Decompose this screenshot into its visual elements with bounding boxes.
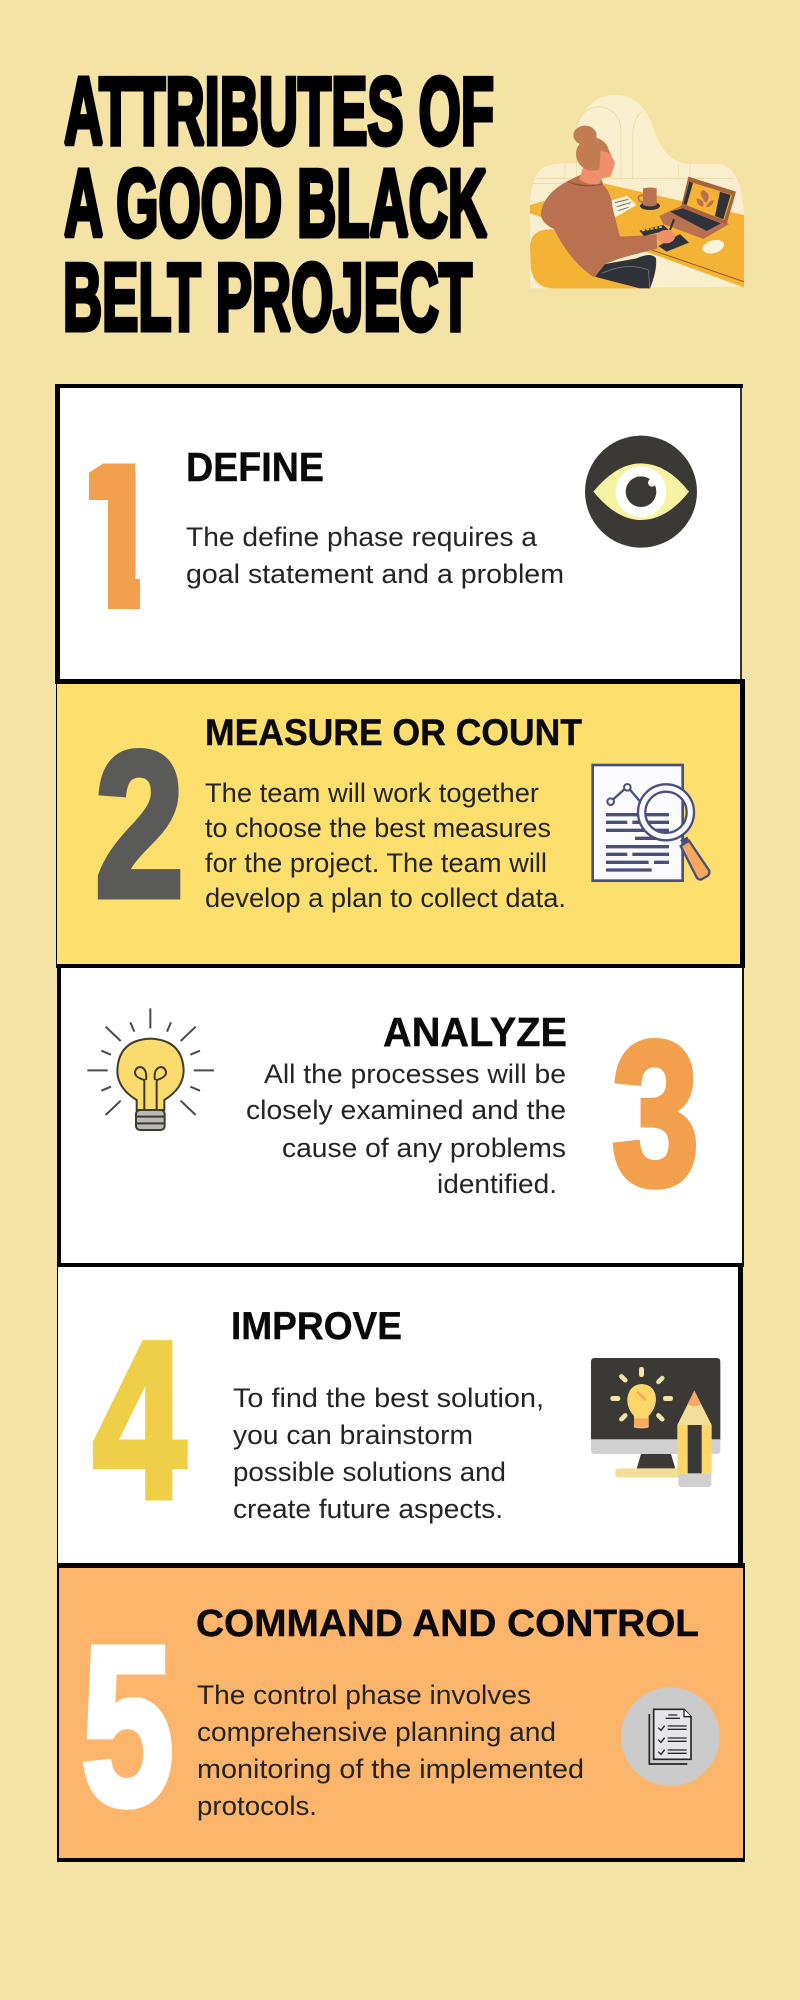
heading: IMPROVE <box>231 1305 402 1348</box>
body text: to choose the best measures <box>205 813 551 843</box>
number 4: 4 <box>93 1296 186 1545</box>
body text: To find the best solution, <box>233 1383 544 1413</box>
body text: develop a plan to collect data. <box>205 883 566 913</box>
body text: The team will work together <box>205 778 539 808</box>
title: BELT PROJECT <box>63 244 472 351</box>
number 2: 2 <box>95 709 184 940</box>
icon: eye <box>585 436 697 548</box>
body text: cause of any problems <box>282 1133 566 1163</box>
body text: create future aspects. <box>233 1494 503 1524</box>
icon: light bulb <box>87 1008 214 1130</box>
heading: MEASURE OR COUNT <box>205 712 582 753</box>
heading: COMMAND AND CONTROL <box>196 1603 699 1645</box>
body text: identified. <box>437 1169 557 1199</box>
woman <box>541 126 689 288</box>
body text: The control phase involves <box>197 1680 531 1710</box>
icon: monitor with bulb and pencil <box>591 1358 720 1487</box>
panel 1: define <box>55 384 743 684</box>
icon: checklist document <box>621 1687 720 1786</box>
laptop <box>659 177 736 239</box>
body text <box>205 778 566 913</box>
body text: comprehensive planning and <box>197 1717 556 1747</box>
body text <box>233 1383 544 1524</box>
number 1: 1 <box>57 426 167 646</box>
coffee mug <box>638 187 660 210</box>
panel 3: analyze <box>57 964 744 1266</box>
body text: goal statement and a problem <box>186 559 564 589</box>
body text <box>197 1680 584 1821</box>
body text: protocols. <box>197 1791 317 1821</box>
body text: All the processes will be <box>264 1059 566 1089</box>
body text: monitoring of the implemented <box>197 1754 584 1784</box>
computer mouse <box>701 238 726 256</box>
title <box>63 58 494 351</box>
panel 5: command and control <box>57 1563 745 1862</box>
body text: The define phase requires a <box>186 522 538 552</box>
body text <box>246 1059 566 1199</box>
body text: for the project. The team will <box>205 848 547 878</box>
illustration: woman working at a laptop <box>530 95 744 288</box>
body text: you can brainstorm <box>233 1420 473 1450</box>
body text: possible solutions and <box>233 1457 506 1487</box>
icon: document with magnifying glass <box>593 765 709 881</box>
heading: ANALYZE <box>383 1009 567 1055</box>
heading: DEFINE <box>186 444 324 490</box>
number 3: 3 <box>612 1000 699 1228</box>
body text <box>186 522 564 589</box>
paper <box>611 196 637 217</box>
body text: closely examined and the <box>246 1095 566 1125</box>
panel 4: improve <box>57 1263 744 1566</box>
title: A GOOD BLACK <box>64 150 487 257</box>
number 5: 5 <box>81 1600 174 1853</box>
panel 2: measure or count <box>56 679 745 968</box>
